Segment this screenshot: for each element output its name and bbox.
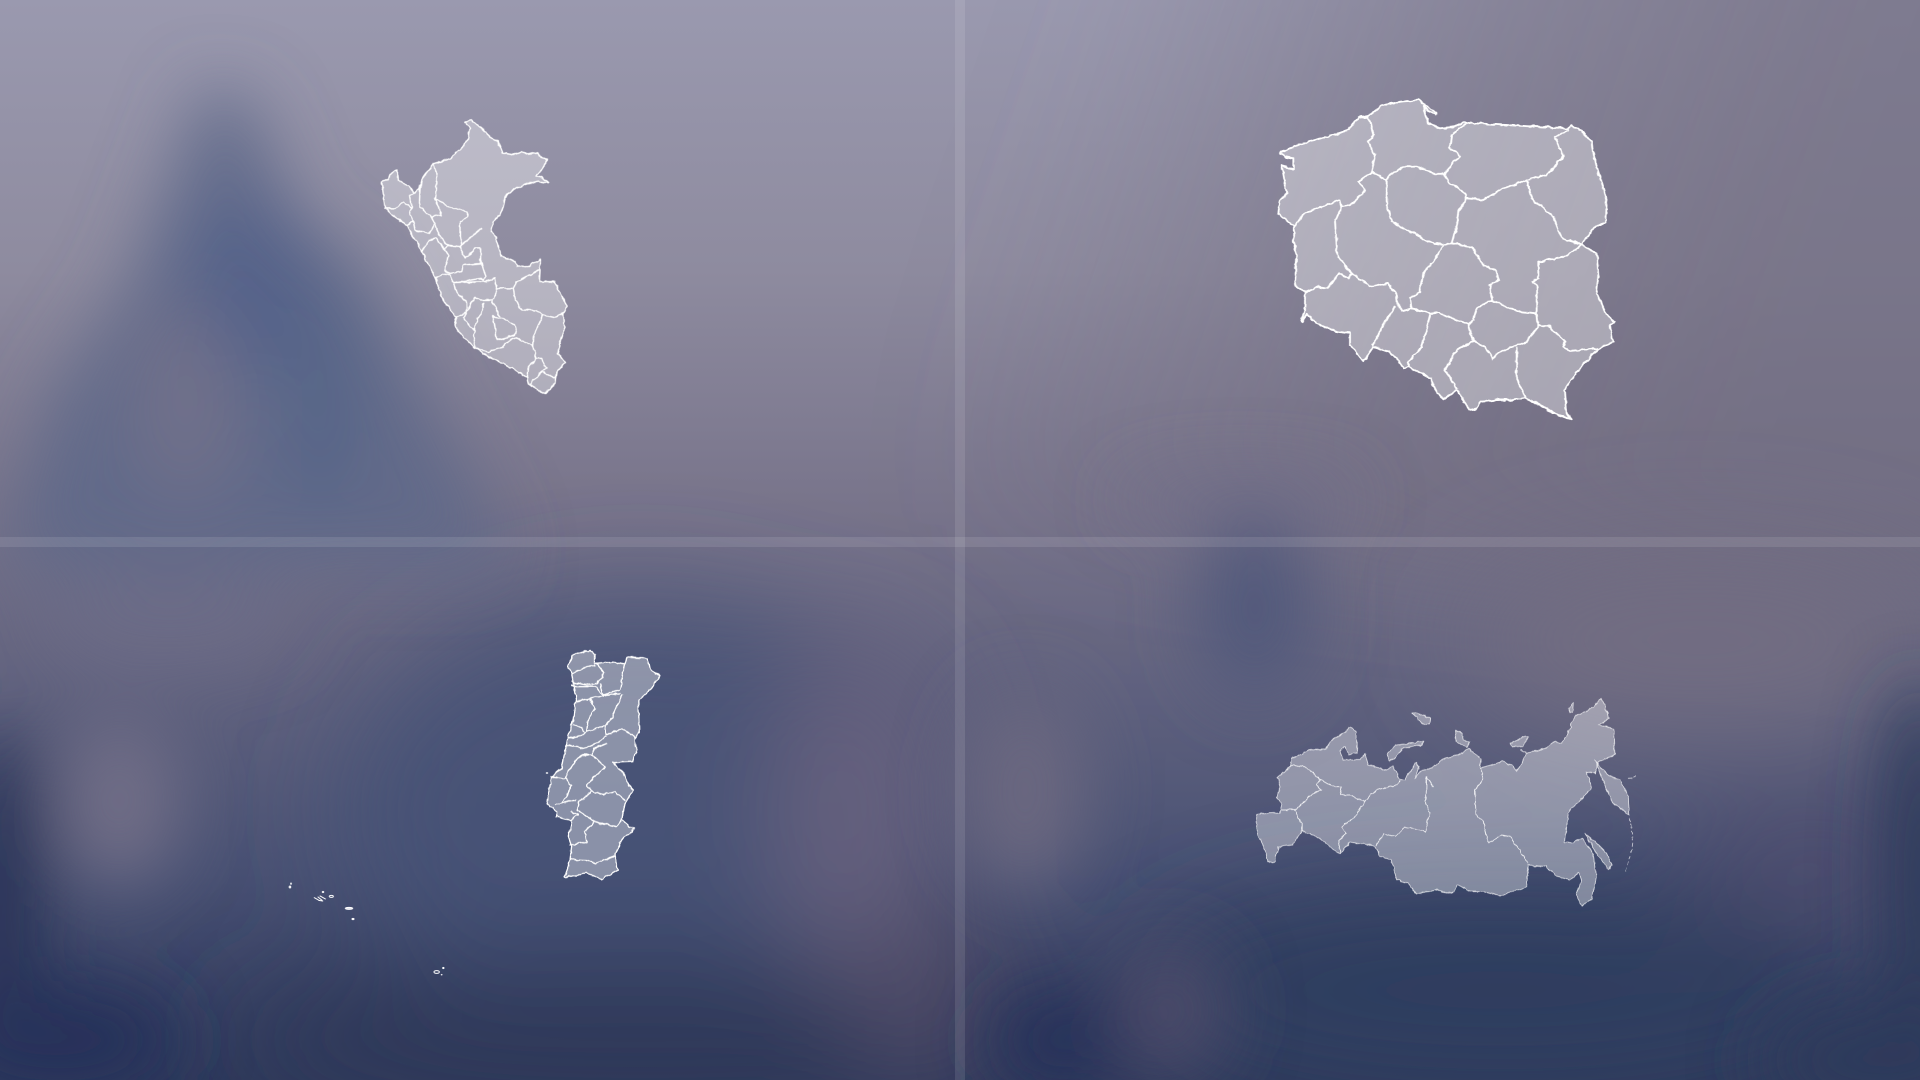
- map: Poland: [1278, 100, 1614, 419]
- Arctic and Pacific islands: [1387, 703, 1636, 871]
- Azores and Madeira islands: [289, 773, 548, 975]
- horizontal divider: [0, 537, 1920, 547]
- map: Portugal: [289, 650, 660, 975]
- vertical divider: [955, 0, 965, 1080]
- map: Peru: [382, 121, 567, 394]
- map: Russia: [1257, 698, 1636, 907]
